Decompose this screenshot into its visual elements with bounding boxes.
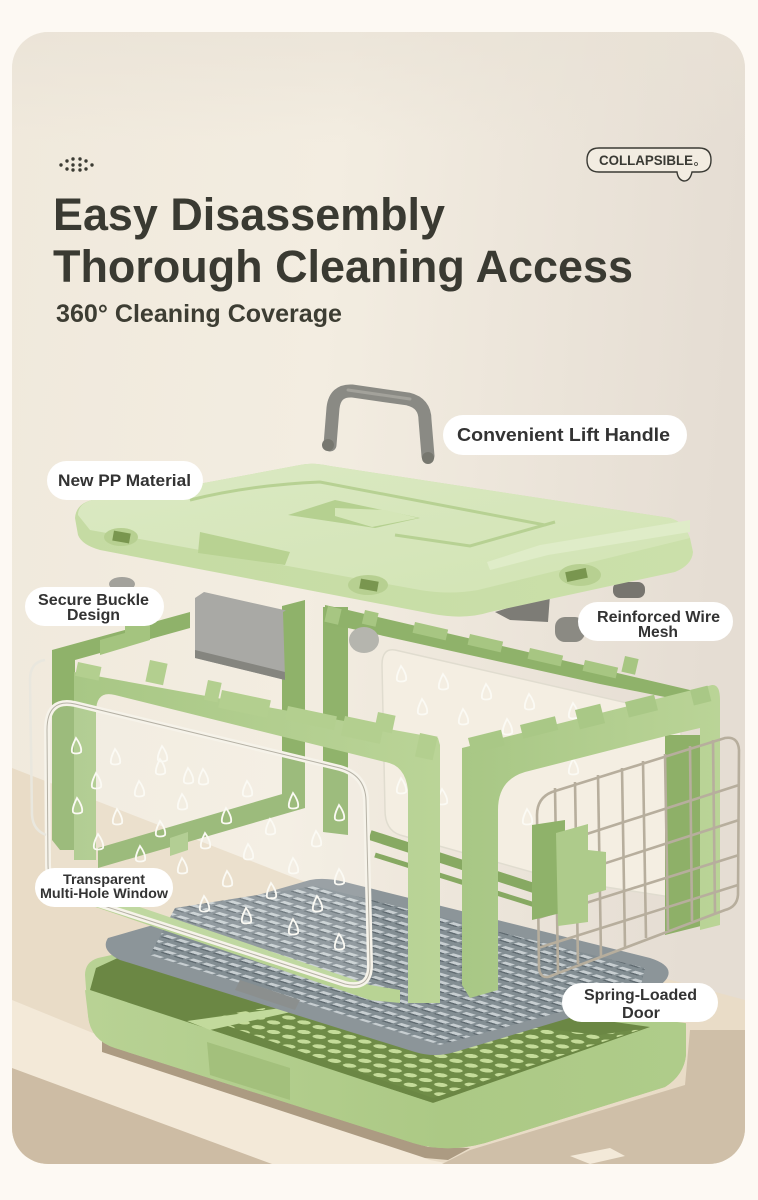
- small gray pegs and knob: [109, 577, 645, 653]
- title: Thorough Cleaning Access: [53, 241, 633, 292]
- lid: [75, 464, 693, 617]
- title: [53, 189, 633, 292]
- back frame: left side: [52, 600, 305, 868]
- label: new PP material: New PP Material: [58, 472, 191, 490]
- label: spring-loaded door: Spring-Loaded: [584, 987, 697, 1004]
- transparent multi-hole window: [30, 660, 370, 985]
- label: new PP material: [47, 461, 203, 500]
- subtitle: 360° Cleaning Coverage: [56, 300, 342, 328]
- right cage frame: [462, 685, 720, 998]
- label: convenient lift handle: Convenient Lift Handle: [457, 424, 670, 445]
- label: transparent multi-hole window: [35, 868, 173, 907]
- label: spring-loaded door: [562, 983, 718, 1022]
- label: secure buckle design: [25, 587, 164, 626]
- badge: collapsible: [587, 148, 711, 181]
- front-left cage frame: [60, 660, 440, 1003]
- gray litter grid: [106, 879, 669, 1055]
- label: transparent multi-hole window: Multi-Hole Window: [40, 885, 168, 901]
- label: convenient lift handle: [443, 415, 687, 455]
- door latch: [532, 820, 606, 926]
- badge: collapsible: COLLAPSIBLE: [599, 152, 693, 168]
- bottom tray: [85, 952, 686, 1148]
- label: secure buckle design: Secure Buckle: [38, 592, 149, 609]
- label: spring-loaded door: Door: [622, 1005, 660, 1022]
- title: Easy Disassembly: [53, 189, 445, 240]
- gray buckle plate: [195, 592, 305, 690]
- label: reinforced wire mesh: Reinforced Wire: [597, 609, 720, 626]
- label: reinforced wire mesh: [578, 602, 733, 641]
- label: transparent multi-hole window: Transparent: [63, 871, 145, 887]
- back frame: rear wall with clear panel: [323, 605, 690, 905]
- lift handle: [322, 390, 434, 464]
- label: secure buckle design: Design: [67, 607, 120, 624]
- spring-loaded wire door: [537, 738, 739, 977]
- label: reinforced wire mesh: Mesh: [638, 624, 678, 641]
- decorative dot cluster icon: [59, 157, 94, 172]
